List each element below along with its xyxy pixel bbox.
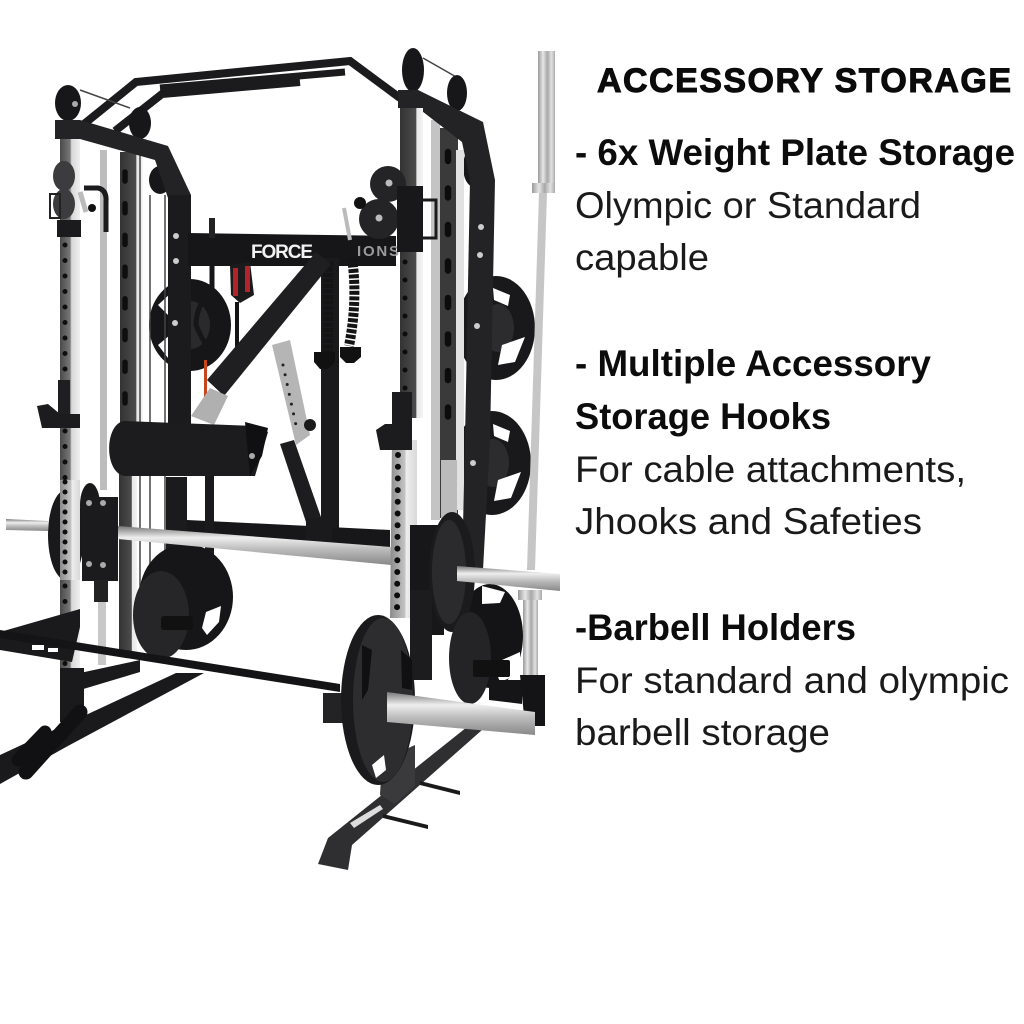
- feature: accessory storage hooks: - Multiple Accessory: [575, 343, 931, 384]
- feature: weight plate storage: capable: [575, 237, 709, 278]
- barbell holder: [518, 590, 545, 726]
- feature: weight plate storage: [575, 132, 1015, 278]
- left carriage: [82, 497, 118, 602]
- feature: weight plate storage: - 6x Weight Plate Storage: [575, 132, 1015, 173]
- left front upright: [58, 137, 80, 692]
- left base frame: [0, 609, 204, 784]
- feature: accessory storage hooks: For cable attachments,: [575, 449, 966, 490]
- top pulleys: [55, 48, 485, 194]
- feature: barbell holders: [575, 607, 1009, 753]
- lat pulley block: [344, 166, 436, 252]
- hanging strap: [204, 262, 254, 405]
- long front bar: [0, 630, 340, 692]
- rear crossbar with logo: FORCE: [251, 242, 313, 263]
- left safety hook: [37, 404, 80, 428]
- feature: barbell holders: barbell storage: [575, 712, 830, 753]
- lower crossbar: [187, 476, 390, 558]
- right middle plate and carriage: [410, 512, 560, 680]
- top arch tubes: [80, 58, 458, 131]
- right top beam and black upright: [398, 90, 495, 570]
- left cable trolley: [50, 161, 106, 237]
- left top beam and black upright: [55, 120, 191, 649]
- right front upright: [376, 108, 423, 618]
- right rear plates: [453, 276, 535, 688]
- left rear upright: [119, 152, 143, 655]
- feature: barbell holders: -Barbell Holders: [575, 607, 856, 648]
- feature: accessory storage hooks: Storage Hooks: [575, 396, 831, 437]
- smith barbell: [6, 519, 391, 565]
- gym rig illustration: [0, 48, 560, 870]
- title: ACCESSORY STORAGE: [597, 62, 1011, 100]
- rear post and rope: [314, 258, 361, 528]
- rear crossbar with logo: [188, 218, 399, 358]
- rear plate on left upright: [149, 279, 231, 371]
- leg arm assembly: [191, 252, 331, 522]
- feature: weight plate storage: Olympic or Standard: [575, 185, 921, 226]
- feature: barbell holders: For standard and olympic: [575, 660, 1009, 701]
- lower right plate with peg: [449, 612, 522, 704]
- right base frame: [318, 727, 482, 870]
- front weight plate: [323, 615, 535, 785]
- right inner upright: [431, 120, 464, 520]
- vertical stored barbell: [527, 51, 555, 570]
- roller pad: [109, 421, 268, 476]
- rear crossbar with logo: IONS: [357, 243, 399, 260]
- cable rods: [98, 150, 165, 665]
- left floor plates: [133, 544, 233, 659]
- left carriage plate behind: [48, 480, 100, 580]
- feature: accessory storage hooks: Jhooks and Safeties: [575, 501, 922, 542]
- feature: accessory storage hooks: [575, 343, 966, 542]
